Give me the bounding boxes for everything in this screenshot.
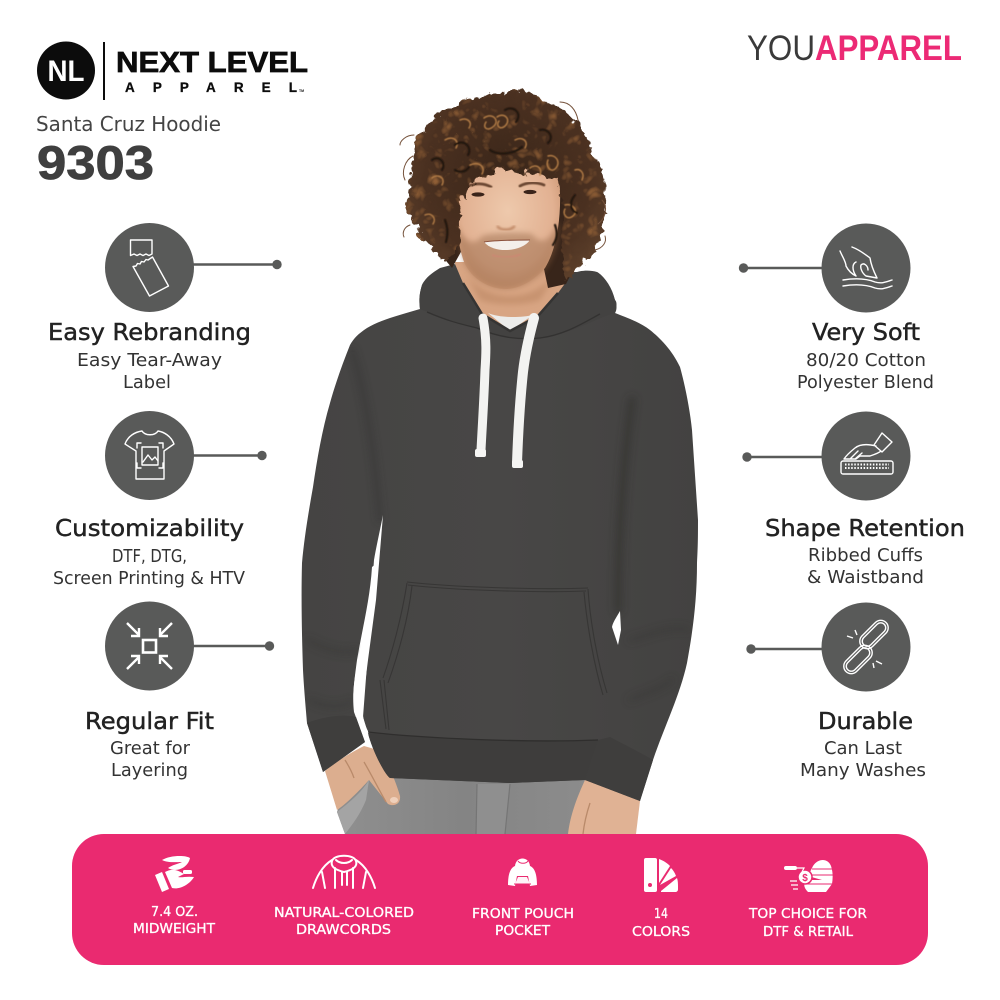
label: MIDWEIGHT <box>133 921 216 937</box>
icon: printed t-shirt <box>105 411 194 500</box>
description <box>797 351 934 393</box>
icon: chain link <box>822 602 910 692</box>
heading: Easy Rebranding <box>48 320 251 346</box>
item: colors <box>632 858 690 940</box>
label <box>632 906 690 940</box>
label: NATURAL-COLORED <box>274 905 414 921</box>
retailer logo: YouApparel: YOU <box>747 29 815 68</box>
description <box>110 739 191 781</box>
retailer logo: YouApparel: APPAREL <box>815 29 962 68</box>
description <box>800 739 926 781</box>
face <box>455 155 560 289</box>
hair back mass <box>429 150 585 288</box>
icon: hand pressing ribbed cuff <box>822 412 910 500</box>
item: top choice <box>748 860 867 940</box>
description: Great for <box>110 739 191 759</box>
callout line <box>739 263 825 273</box>
description: DTF, DTG, <box>112 547 187 567</box>
heading: Customizability <box>55 516 244 542</box>
item: drawcords <box>274 856 414 938</box>
logo badge: NL <box>48 55 84 88</box>
pants <box>337 770 590 834</box>
label: 14 <box>654 906 668 922</box>
logo wordmark: APPAREL <box>125 80 297 95</box>
description: Screen Printing & HTV <box>53 569 245 589</box>
label <box>274 905 414 938</box>
brand logo: Next Level Apparel <box>37 42 308 100</box>
label <box>133 904 216 937</box>
model wearing hoodie <box>302 87 698 834</box>
label: FRONT POUCH <box>472 906 574 922</box>
product name: Santa Cruz Hoodie <box>36 112 221 136</box>
icon: colour swatch fan <box>644 858 678 892</box>
hoodie body and arms <box>302 272 698 801</box>
label: POCKET <box>495 923 551 939</box>
feature: Regular Fit <box>85 602 274 781</box>
drawcords <box>481 318 534 463</box>
front pouch pocket <box>380 582 607 730</box>
feature: Customizability <box>53 411 267 589</box>
gap between right arm and torso <box>612 611 621 645</box>
description: Easy Tear-Away <box>77 351 222 371</box>
cord ends <box>475 449 523 468</box>
icon: hand on soft fabric <box>822 224 910 312</box>
item: pocket <box>472 858 574 939</box>
icon: hoodie outline <box>313 856 375 888</box>
logo wordmark: NEXT LEVEL <box>116 47 308 79</box>
eyebrows and eyes <box>468 183 544 197</box>
icon: roller, coin and hoodie: $ <box>802 873 808 884</box>
callout line <box>190 451 267 460</box>
neck <box>455 262 566 330</box>
callout line <box>190 260 282 269</box>
description: Layering <box>111 761 188 781</box>
label: DTF & RETAIL <box>763 924 853 940</box>
nose <box>497 226 515 230</box>
t-shirt collar <box>488 313 533 331</box>
feature: Durable <box>746 602 926 781</box>
description <box>77 351 222 393</box>
icon: tear-away label <box>105 223 194 312</box>
left hand <box>325 746 400 810</box>
item: weight <box>133 856 216 937</box>
style number: 9303 <box>37 136 154 189</box>
heading: Shape Retention <box>765 516 965 542</box>
description: Label <box>123 373 171 393</box>
description <box>807 546 924 588</box>
logo badge <box>37 42 95 100</box>
description: Can Last <box>824 739 902 759</box>
heading: Very Soft <box>812 320 920 346</box>
feature: Easy Rebranding <box>48 223 282 393</box>
gap between left arm and torso <box>353 515 383 742</box>
heading: Regular Fit <box>85 709 214 735</box>
hood <box>419 264 616 339</box>
icon: compress arrows <box>105 602 194 690</box>
description: Polyester Blend <box>797 373 934 393</box>
icon: hand with leaf <box>155 856 194 892</box>
description <box>53 547 245 589</box>
label: DRAWCORDS <box>296 922 391 938</box>
logo wordmark: TM <box>299 89 304 93</box>
label: 7.4 OZ. <box>151 904 198 920</box>
label: TOP CHOICE FOR <box>748 906 867 922</box>
feature: Shape Retention <box>742 412 965 588</box>
label <box>472 906 574 939</box>
callout line <box>746 644 825 654</box>
description: Ribbed Cuffs <box>808 546 923 566</box>
left cuff <box>307 716 365 772</box>
curly hair mass <box>405 87 602 280</box>
waistband <box>368 733 598 783</box>
hair curls <box>425 108 583 245</box>
icon: hoodie with pocket <box>508 858 537 886</box>
right hand <box>568 780 640 834</box>
feature: Very Soft <box>739 224 934 393</box>
logo wordmark <box>116 47 308 95</box>
retailer logo: YouApparel <box>747 29 962 68</box>
description: 80/20 Cotton <box>806 351 926 371</box>
hoodie shading <box>308 350 688 706</box>
label <box>748 906 867 940</box>
heading: Durable <box>818 709 913 735</box>
description: & Waistband <box>807 568 924 588</box>
smile <box>484 240 530 257</box>
beard stubble <box>456 220 560 289</box>
callout line <box>190 641 274 651</box>
stray curls around hair <box>400 102 606 250</box>
right cuff <box>585 737 653 801</box>
bar background <box>72 834 928 965</box>
callout line <box>742 452 825 462</box>
description: Many Washes <box>800 761 926 781</box>
label: COLORS <box>632 924 690 940</box>
pink feature bar <box>72 834 928 965</box>
